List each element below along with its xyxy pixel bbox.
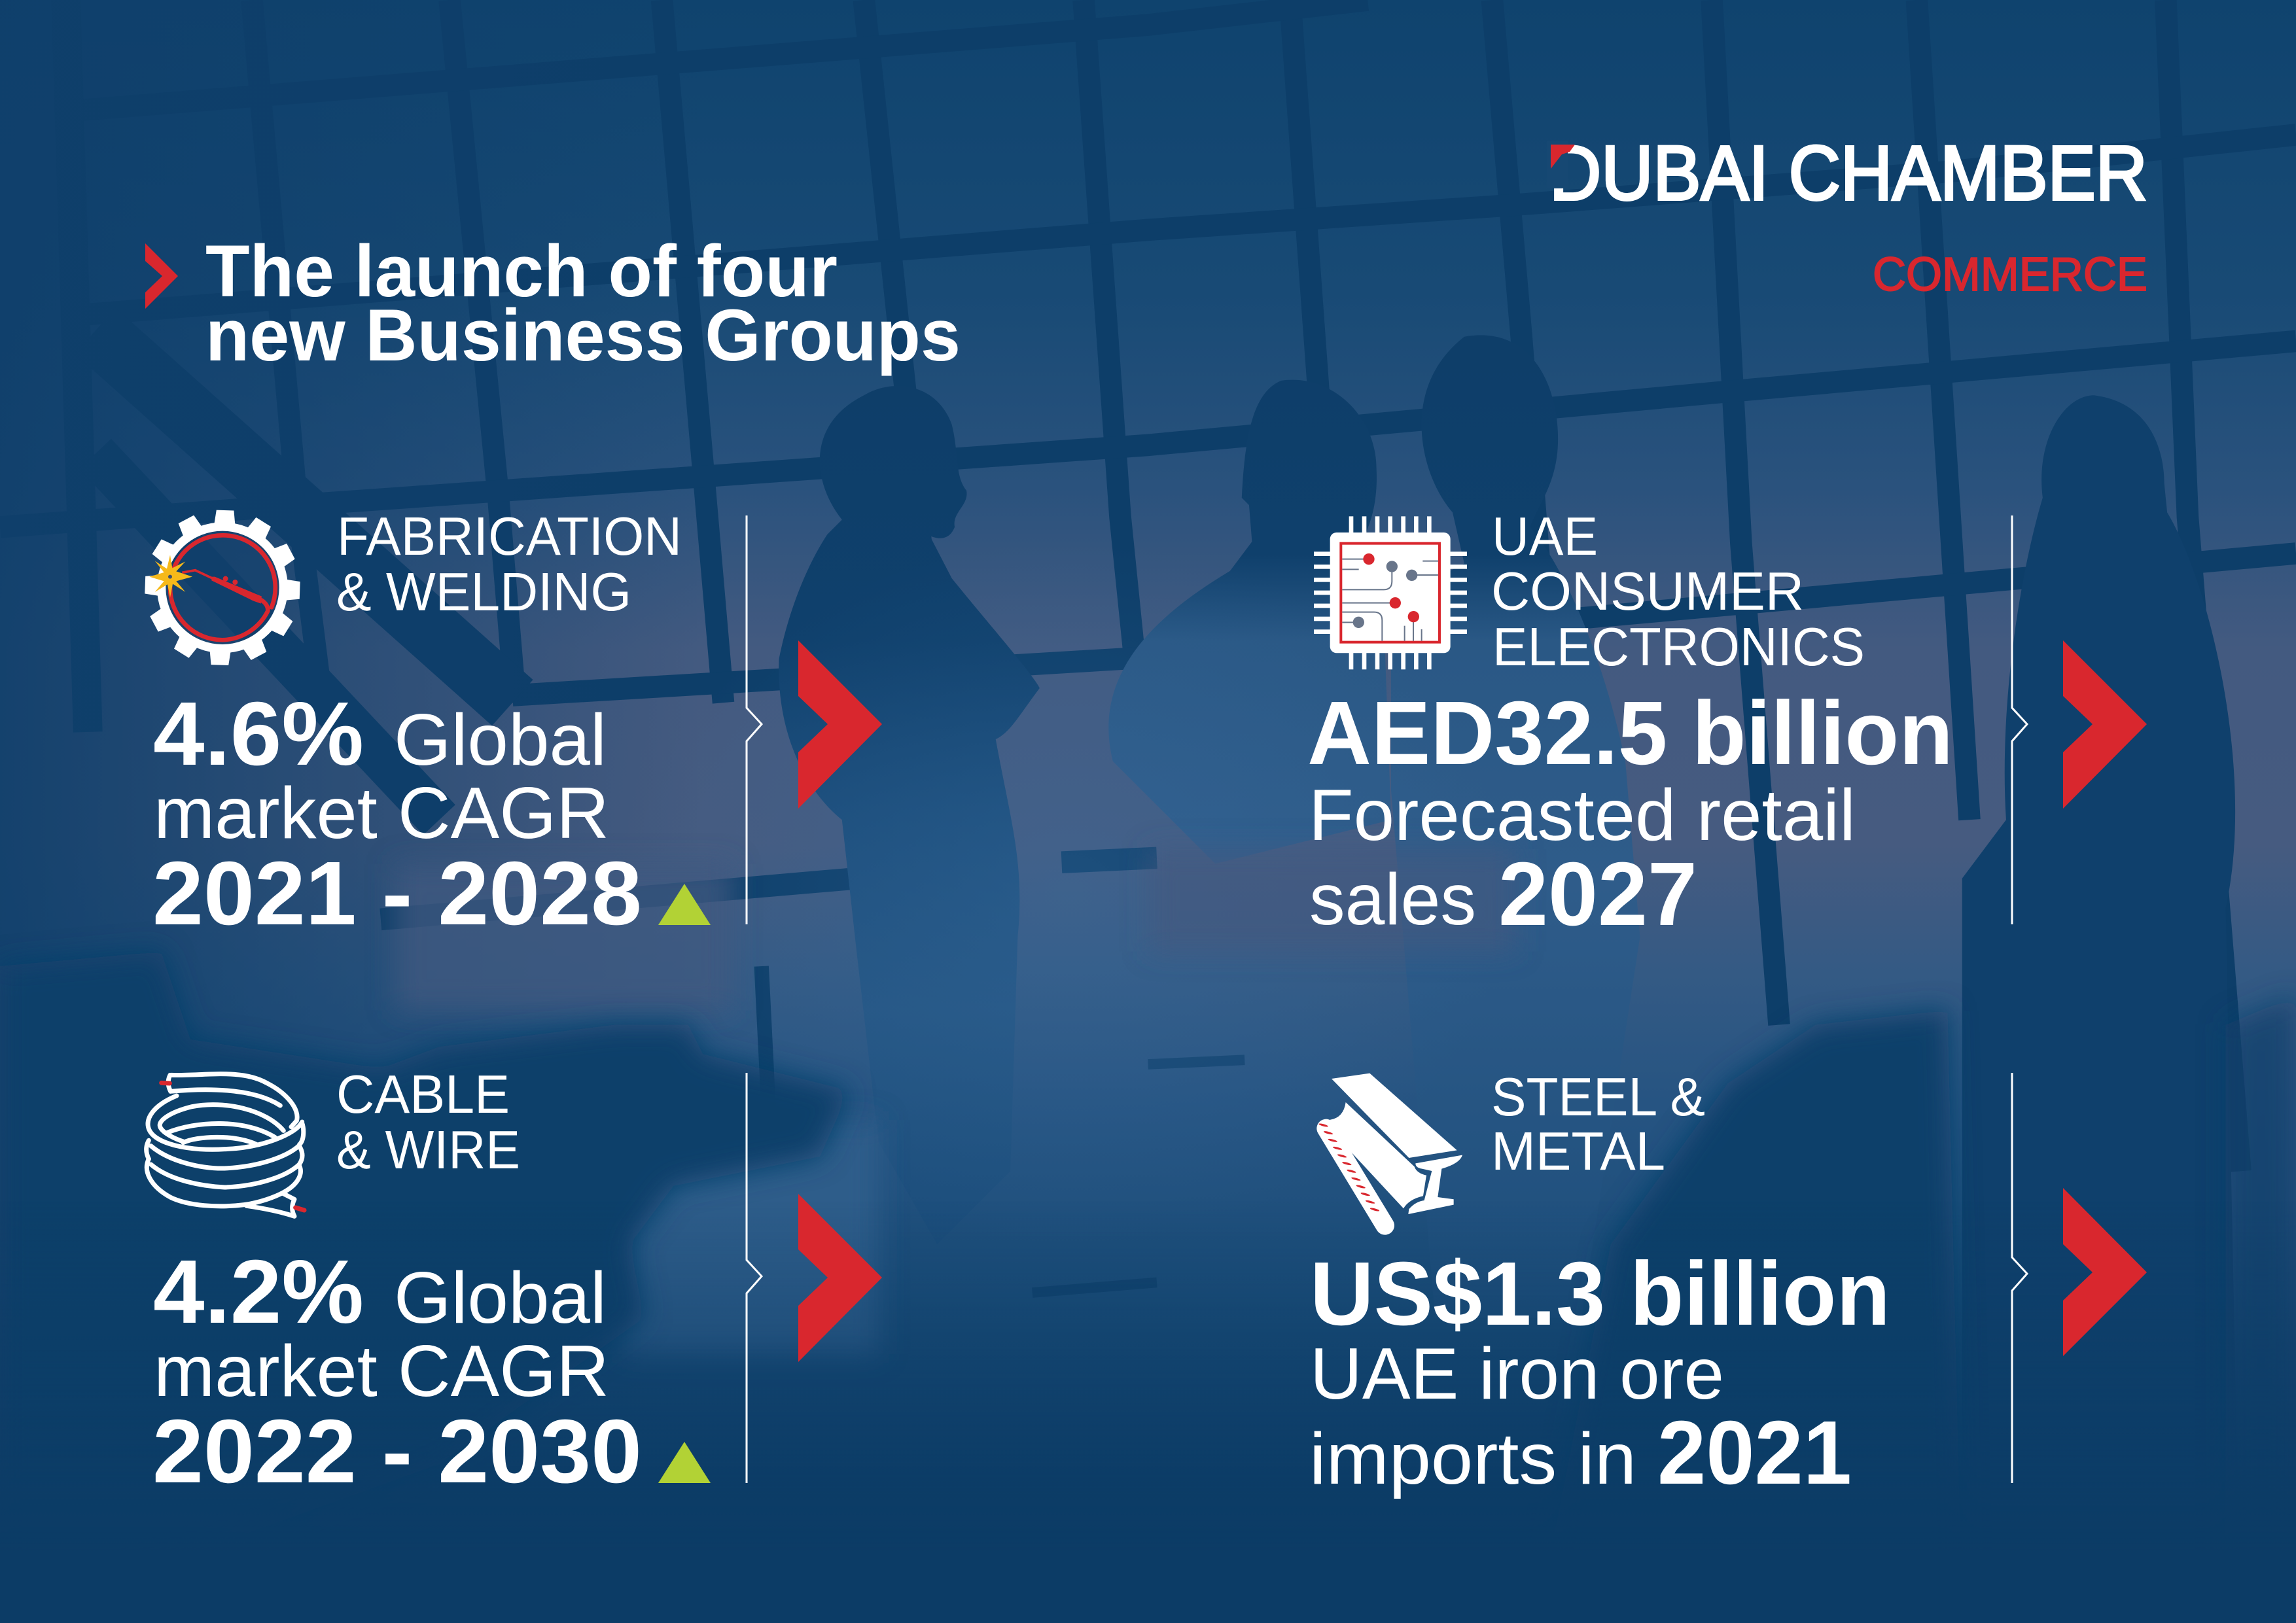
- panel: steel and metal: imports in: [1309, 1418, 1636, 1499]
- panel: fabrication and welding: [145, 506, 882, 944]
- dark foreground shapes: [0, 952, 2296, 1622]
- icon: up triangle: [658, 1442, 711, 1483]
- arrow: chevron: [2063, 640, 2147, 809]
- title with chevron: [145, 230, 961, 376]
- panel: steel and metal: [1309, 1066, 2147, 1503]
- panel: steel and metal: METAL: [1491, 1121, 1665, 1181]
- divider with notch: [747, 515, 762, 924]
- panel: UAE consumer electronics: CONSUMER: [1491, 561, 1804, 621]
- icon: microchip: [1314, 516, 1467, 669]
- panel: cable and wire: & WIRE: [336, 1119, 520, 1180]
- divider with notch: [747, 1073, 762, 1483]
- statistic: 4.2%: [153, 1242, 364, 1342]
- divider with notch: [2012, 1073, 2027, 1483]
- city and furniture light patches: [395, 849, 1515, 1354]
- panel: fabrication and welding: 2021 - 2028: [152, 843, 642, 944]
- panel: UAE consumer electronics: [1307, 506, 2147, 945]
- heading: UAE: [1492, 506, 1598, 567]
- title with chevron: new Business Groups: [205, 294, 961, 376]
- panel: fabrication and welding: & WELDING: [336, 561, 631, 622]
- title with chevron: The launch of four: [205, 230, 838, 312]
- statistic: 4.6%: [153, 684, 364, 784]
- silhouette: far-right person: [1962, 395, 2240, 1622]
- panel: UAE consumer electronics: 2027: [1498, 844, 1697, 945]
- panel: cable and wire: Global: [394, 1257, 607, 1338]
- statistic: US$1.3 billion: [1310, 1244, 1890, 1344]
- panel: steel and metal: 2021: [1657, 1403, 1852, 1503]
- label: Commerce: COMMERCE: [1873, 249, 2147, 301]
- icon: gear with welding torch: [145, 510, 300, 665]
- arrow: chevron: [798, 1194, 882, 1362]
- heading: FABRICATION: [337, 506, 682, 567]
- icon: steel beam and rebar: [1318, 1073, 1462, 1225]
- panel: UAE consumer electronics: ELECTRONICS: [1492, 616, 1865, 677]
- panel: cable and wire: market CAGR: [154, 1331, 609, 1412]
- silhouette: man on the phone: [779, 386, 1040, 1244]
- divider with notch: [2012, 515, 2027, 924]
- panel: fabrication and welding: market CAGR: [154, 773, 609, 854]
- logo: Dubai Chamber: DUBAI CHAMBER: [1549, 130, 2147, 217]
- statistic: AED32.5 billion: [1307, 683, 1953, 784]
- central light glow: [629, 542, 1508, 1244]
- panel: UAE consumer electronics: Forecasted retail: [1309, 775, 1856, 856]
- panel: UAE consumer electronics: sales: [1309, 859, 1476, 940]
- arrow: chevron: [798, 640, 882, 809]
- panel: cable and wire: 2022 - 2030: [152, 1401, 642, 1502]
- left darkening: [0, 0, 703, 1623]
- arrow: chevron: [2063, 1188, 2147, 1356]
- panel: fabrication and welding: Global: [394, 699, 607, 780]
- heading: CABLE: [336, 1064, 510, 1125]
- bottom fade: [0, 1200, 2296, 1623]
- icon: coiled cable: [147, 1074, 304, 1216]
- silhouette: man in profile: [1108, 380, 1391, 864]
- panel: cable and wire: [147, 1064, 882, 1502]
- silhouette: man from behind: [1391, 335, 1640, 1318]
- icon: up triangle: [658, 884, 711, 925]
- heading: STEEL &: [1491, 1066, 1705, 1127]
- panel: steel and metal: UAE iron ore: [1310, 1333, 1724, 1414]
